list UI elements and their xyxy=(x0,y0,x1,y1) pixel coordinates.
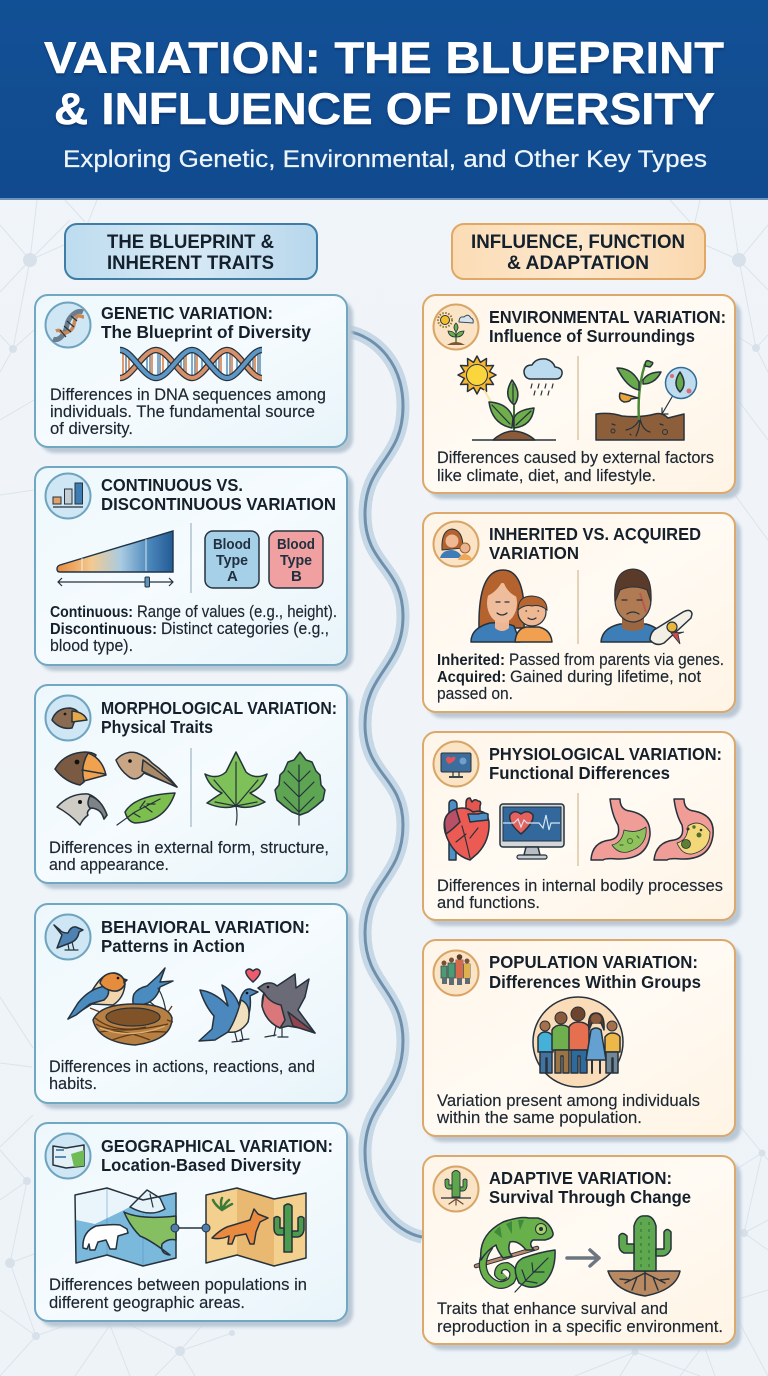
person 3 xyxy=(569,1007,589,1073)
person 1 xyxy=(538,1021,553,1073)
heading: Location-Based Diversity xyxy=(101,1155,301,1175)
icon: cactus xyxy=(434,1166,478,1212)
description: Differences in external form, structure, xyxy=(49,839,329,857)
illustration: leaf xyxy=(515,1250,555,1292)
description xyxy=(436,1092,700,1127)
column heading: blueprint and inherent traits xyxy=(65,224,317,279)
description xyxy=(437,651,724,703)
description: Continuous: xyxy=(50,604,133,621)
description: blood type). xyxy=(50,637,133,655)
description: individuals. The fundamental source xyxy=(50,403,315,421)
illustration: people in circle xyxy=(533,997,623,1087)
description: Differences between populations in xyxy=(49,1276,307,1294)
illustration: bird feeding at nest xyxy=(68,968,173,1045)
heading xyxy=(101,475,336,514)
illustration: stomach with green contents xyxy=(591,799,650,860)
illustration: double helix xyxy=(120,350,262,378)
icon: monitor xyxy=(434,742,478,786)
heading: ENVIRONMENTAL VARIATION: xyxy=(489,307,726,327)
blood type A box: Type xyxy=(216,552,248,569)
illustration: child xyxy=(515,596,552,642)
arrow xyxy=(567,1250,599,1266)
heading: GEOGRAPHICAL VARIATION: xyxy=(101,1136,333,1156)
illustration: small leaf xyxy=(117,793,175,825)
panel: morphological variation xyxy=(35,685,353,889)
panel: population variation xyxy=(423,940,741,1142)
heading: Patterns in Action xyxy=(101,936,245,956)
heading xyxy=(489,744,722,783)
heading: MORPHOLOGICAL VARIATION: xyxy=(101,698,337,718)
illustration: cactus with roots xyxy=(608,1216,680,1296)
description xyxy=(437,1300,723,1336)
blood type B box: B xyxy=(291,568,302,585)
icon: bird head xyxy=(46,696,90,740)
heading: ADAPTIVE VARIATION: xyxy=(489,1168,672,1188)
illustration: serrated leaf xyxy=(275,752,325,825)
description: Variation present among individuals xyxy=(437,1092,700,1110)
description: Differences in DNA sequences among xyxy=(50,386,326,404)
heading xyxy=(101,303,311,342)
heading: Survival Through Change xyxy=(489,1187,691,1207)
heading: Differences Within Groups xyxy=(489,972,701,992)
blood type B box xyxy=(269,531,323,588)
column heading: blueprint and inherent traits: THE BLUEPRINT & xyxy=(107,232,274,253)
blood type B box: Type xyxy=(280,552,312,569)
heading: Functional Differences xyxy=(489,763,670,783)
heading: The Blueprint of Diversity xyxy=(101,322,311,342)
illustration: sun xyxy=(458,356,502,420)
chart: continuous gradient wedge xyxy=(57,531,173,587)
illustration: two courting birds xyxy=(199,969,315,1042)
heading xyxy=(101,917,310,956)
description xyxy=(49,839,329,874)
description: Passed from parents via genes. xyxy=(509,651,724,669)
illustration: long-beaked bird head xyxy=(116,752,177,787)
heading xyxy=(101,698,337,737)
illustration: lobed leaf xyxy=(205,752,267,825)
heading xyxy=(489,524,701,563)
heading: PHYSIOLOGICAL VARIATION: xyxy=(489,744,722,764)
description: of diversity. xyxy=(50,420,133,438)
description: and appearance. xyxy=(49,856,169,874)
description: and functions. xyxy=(437,894,540,912)
description: Differences in internal bodily processes xyxy=(437,877,723,895)
description: Acquired: xyxy=(437,669,506,686)
description: Inherited: xyxy=(437,652,505,669)
heading: Influence of Surroundings xyxy=(489,326,695,346)
description xyxy=(437,877,723,912)
description: different geographic areas. xyxy=(49,1294,245,1312)
illustration: heart xyxy=(444,798,489,860)
column heading: influence, function and adaptation xyxy=(452,224,705,279)
illustration: sprout on mound xyxy=(472,380,556,440)
title xyxy=(44,34,724,134)
panel: behavioral variation xyxy=(35,904,353,1109)
illustration: chameleon xyxy=(476,1218,553,1285)
description: Traits that enhance survival and xyxy=(437,1300,668,1318)
subtitle: Exploring Genetic, Environmental, and Other Key Types xyxy=(63,146,707,173)
heading: CONTINUOUS VS. xyxy=(101,475,243,495)
heading: GENETIC VARIATION: xyxy=(101,303,273,323)
description: Discontinuous: xyxy=(50,621,157,638)
description: reproduction in a specific environment. xyxy=(437,1318,723,1336)
panel: environmental variation xyxy=(423,295,741,499)
icon: sun, cloud and plant xyxy=(434,304,478,350)
description: Range of values (e.g., height). xyxy=(137,603,337,621)
description xyxy=(437,449,714,485)
blood type A box: A xyxy=(227,568,238,585)
panel: genetic variation xyxy=(35,295,353,453)
icon: bar chart xyxy=(46,474,90,518)
title: & INFLUENCE OF DIVERSITY xyxy=(54,85,715,134)
panel: continuous vs discontinuous variation xyxy=(35,467,353,671)
illustration: rain cloud xyxy=(524,359,562,395)
icon: dna xyxy=(46,302,90,348)
illustration: man with scar and diploma xyxy=(601,569,692,644)
description: Distinct categories (e.g., xyxy=(161,620,329,638)
column heading: blueprint and inherent traits: INHERENT TRAITS xyxy=(107,253,274,274)
column heading: influence, function and adaptation: INFLUENCE, FUNCTION xyxy=(471,232,685,253)
icon: group of people xyxy=(434,950,478,996)
description: within the same population. xyxy=(436,1109,642,1127)
icon: perching bird xyxy=(46,914,90,960)
connector: wavy line linking the two columns xyxy=(347,331,422,1237)
illustration: plant in soil with nutrient callout xyxy=(596,361,696,440)
person 4 xyxy=(586,1013,606,1073)
panel: physiological variation xyxy=(423,732,741,926)
heading xyxy=(489,1168,691,1207)
heading xyxy=(101,1136,333,1175)
description xyxy=(50,386,326,438)
description xyxy=(49,1058,315,1093)
title: VARIATION: THE BLUEPRINT xyxy=(44,34,724,83)
column heading: influence, function and adaptation: & ADAPTATION xyxy=(507,253,649,274)
description: passed on. xyxy=(437,685,513,703)
heading: INHERITED VS. ACQUIRED xyxy=(489,524,701,544)
illustration: raptor head xyxy=(57,794,107,825)
description: Gained during lifetime, not xyxy=(510,668,701,686)
illustration: finch head xyxy=(55,752,106,785)
link between maps xyxy=(171,1224,210,1232)
description: habits. xyxy=(49,1075,97,1093)
heading: VARIATION xyxy=(489,543,579,563)
header banner xyxy=(0,0,768,200)
heading xyxy=(489,952,701,992)
panel: geographical variation xyxy=(35,1123,353,1327)
illustration: desert map with fox and cactus xyxy=(206,1188,306,1266)
person 2 xyxy=(552,1012,571,1073)
description xyxy=(49,1276,307,1312)
blood type A box: Blood xyxy=(213,536,251,553)
illustration: nest xyxy=(90,1004,173,1045)
icon: folded map xyxy=(46,1134,90,1178)
illustration: mother xyxy=(471,570,524,642)
heading: Physical Traits xyxy=(101,717,213,737)
icon: parent and child xyxy=(434,522,478,566)
description: Differences caused by external factors xyxy=(437,449,714,467)
description xyxy=(50,603,337,655)
blood type A box xyxy=(205,531,259,588)
person 5 xyxy=(605,1021,620,1073)
heading: POPULATION VARIATION: xyxy=(489,952,698,972)
blood type B box: Blood xyxy=(277,536,315,553)
description: like climate, diet, and lifestyle. xyxy=(437,467,656,485)
heading: DISCONTINUOUS VARIATION xyxy=(101,494,336,514)
illustration: stomach with bacteria xyxy=(654,799,713,860)
heading xyxy=(489,307,726,346)
icon: heart xyxy=(246,969,260,982)
illustration: arctic map with polar bear xyxy=(75,1188,176,1266)
heading: BEHAVIORAL VARIATION: xyxy=(101,917,310,937)
panel: inherited vs acquired variation xyxy=(423,513,741,718)
description: Differences in actions, reactions, and xyxy=(49,1058,315,1076)
panel: adaptive variation xyxy=(423,1156,741,1350)
illustration: monitor with heartbeat xyxy=(500,804,564,859)
